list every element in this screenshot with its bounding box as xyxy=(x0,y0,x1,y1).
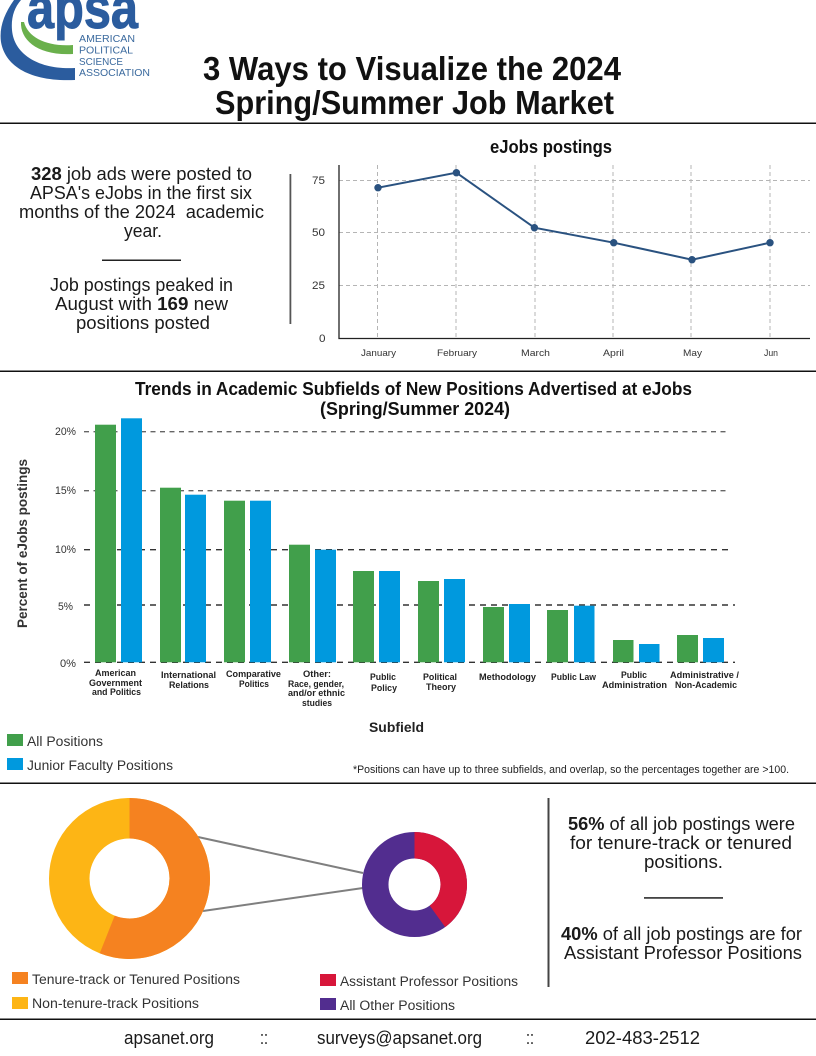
bar chart: subfields: and Politics xyxy=(92,687,141,698)
line chart: eJobs postings: 25 xyxy=(312,280,325,292)
bar chart: subfields: Other: xyxy=(303,669,331,680)
bar chart: subfields: Theory xyxy=(426,682,457,693)
logo: APSA: SCIENCE xyxy=(79,56,123,68)
text block: eJobs summary: months of the 2024 academic xyxy=(19,202,264,222)
donut: tenure-track share xyxy=(69,818,190,939)
text block: eJobs summary: August with 169 new xyxy=(55,294,229,314)
logo: APSA: AMERICAN xyxy=(79,33,135,45)
bar chart: subfields: Policy xyxy=(371,683,398,694)
bar chart: subfields: Public Law xyxy=(551,672,597,683)
text block: share summary: 56% of all job postings were xyxy=(568,814,795,834)
bar chart: subfields: Race, gender, xyxy=(288,679,344,690)
line chart: eJobs postings: 0 xyxy=(319,333,326,345)
footer contact line: :: xyxy=(260,1028,268,1048)
heading: subfields chart: (Spring/Summer 2024) xyxy=(320,399,510,419)
legend: tenure donut xyxy=(12,972,240,1011)
line chart: eJobs postings: April xyxy=(603,348,624,359)
legend: bar chart xyxy=(7,734,173,773)
footer contact line: :: xyxy=(526,1028,534,1048)
bar chart: subfields: American xyxy=(95,668,136,679)
text block: eJobs summary: 328 job ads were posted to xyxy=(31,164,252,184)
bar chart: subfields: 0% xyxy=(60,658,76,670)
legend: assistant professor donut xyxy=(320,974,518,1013)
donut: assistant professor share xyxy=(375,845,454,924)
bar chart: subfields: Methodology xyxy=(479,672,537,683)
legend: assistant professor donut: All Other Positions xyxy=(340,998,455,1013)
connector lines between donuts xyxy=(198,837,363,911)
line chart: eJobs postings: May xyxy=(683,348,702,359)
footnote: *Positions can have up to three subfields, and overlap, so the percentages together are >100. xyxy=(353,764,789,776)
text block: eJobs summary: year. xyxy=(124,221,162,241)
bar chart: subfields: 10% xyxy=(55,544,76,556)
bar chart: subfields: and/or ethnic xyxy=(288,688,345,699)
legend: bar chart: Junior Faculty Positions xyxy=(27,758,173,773)
text block: share summary: 40% of all job postings are for xyxy=(561,924,802,944)
y axis label: Percent of eJobs postings xyxy=(14,459,30,628)
text block: eJobs summary: Job postings peaked in xyxy=(50,275,233,295)
heading: subfields chart xyxy=(135,379,692,419)
bar chart: subfields: 20% xyxy=(55,426,76,438)
bar chart: subfields: Administrative / xyxy=(670,670,739,681)
line chart: eJobs postings: March xyxy=(521,348,550,359)
line chart: eJobs postings: Jun xyxy=(764,348,778,359)
legend: tenure donut: Tenure-track or Tenured Positions xyxy=(32,972,240,987)
bar chart: subfields: International xyxy=(161,670,216,681)
x axis label: Subfield xyxy=(369,719,424,735)
logo: APSA: POLITICAL xyxy=(79,44,133,56)
heading: subfields chart: Trends in Academic Subfields of New Positions Advertised at eJobs xyxy=(135,379,692,399)
line chart: eJobs postings: eJobs postings xyxy=(490,137,612,157)
legend: assistant professor donut: Assistant Professor Positions xyxy=(340,974,518,989)
text block: share summary xyxy=(561,814,802,963)
footer contact line: surveys@apsanet.org xyxy=(317,1028,482,1048)
bar chart: subfields: Non-Academic xyxy=(675,680,737,691)
text block: share summary: Assistant Professor Positions xyxy=(564,943,802,963)
text block: eJobs summary: APSA's eJobs in the first six xyxy=(30,183,252,203)
line chart: eJobs postings: 50 xyxy=(312,227,325,239)
logo: APSA: ASSOCIATION xyxy=(79,67,150,79)
line chart: eJobs postings: January xyxy=(361,348,396,359)
bar chart: subfields: 5% xyxy=(58,601,73,613)
bar chart: subfields: Politics xyxy=(239,679,269,690)
logo: APSA xyxy=(1,0,150,80)
legend: bar chart: All Positions xyxy=(27,734,103,749)
bar chart: subfields: Political xyxy=(423,672,457,683)
bar chart: subfields: Public xyxy=(621,670,647,681)
text block: eJobs summary xyxy=(19,164,264,333)
legend: tenure donut: Non-tenure-track Positions xyxy=(32,996,199,1011)
footer contact line: apsanet.org xyxy=(124,1028,214,1048)
text block: eJobs summary: positions posted xyxy=(76,313,210,333)
bar chart: subfields: studies xyxy=(302,698,332,709)
bar chart: subfields: Government xyxy=(89,678,143,689)
line chart: eJobs postings: 75 xyxy=(312,175,325,187)
line chart: eJobs postings: February xyxy=(437,348,477,359)
title: Spring/Summer Job Market xyxy=(215,84,614,121)
footer contact line: 202-483-2512 xyxy=(585,1028,700,1048)
line chart: eJobs postings xyxy=(312,137,810,359)
title xyxy=(203,50,622,121)
bar chart: subfields xyxy=(55,418,739,709)
title: 3 Ways to Visualize the 2024 xyxy=(203,50,622,87)
text block: share summary: positions. xyxy=(644,852,723,872)
bar chart: subfields: Public xyxy=(370,672,396,683)
bar chart: subfields: Relations xyxy=(169,680,209,691)
text block: share summary: for tenure-track or tenured xyxy=(570,833,792,853)
bar chart: subfields: Comparative xyxy=(226,669,281,680)
footer contact line xyxy=(124,1028,700,1048)
bar chart: subfields: 15% xyxy=(55,485,76,497)
bar chart: subfields: Administration xyxy=(602,680,667,691)
